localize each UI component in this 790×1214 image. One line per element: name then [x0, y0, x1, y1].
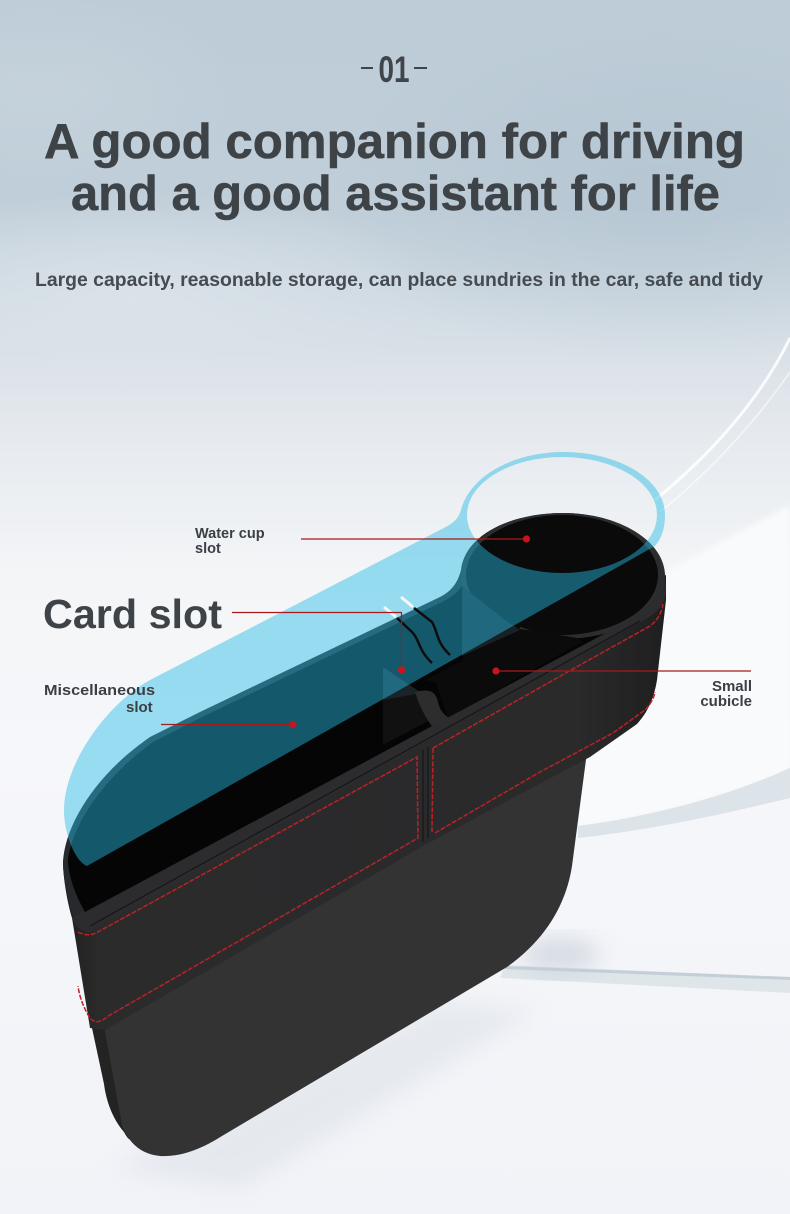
callout: water cup slot: Water cup — [195, 526, 265, 542]
body rim — [63, 513, 666, 925]
leather strap — [63, 575, 666, 1030]
callout: miscellaneous slot: slot — [126, 699, 153, 716]
front lip — [72, 590, 666, 932]
lower panel — [104, 752, 587, 1156]
small cubicle — [425, 600, 582, 718]
callout: water cup slot: slot — [195, 541, 221, 557]
callout: card slot — [43, 591, 405, 674]
clip wires — [384, 597, 450, 663]
blue transparent overlay — [64, 452, 665, 866]
callout: water cup slot — [195, 526, 530, 557]
strap seam — [423, 747, 428, 842]
product: seat gap organizer — [63, 513, 666, 1156]
title: A good companion for driving — [44, 115, 745, 169]
callout: small cubicle: Small — [712, 678, 752, 695]
lower side strip — [92, 1028, 130, 1139]
divider block — [383, 667, 430, 745]
title — [44, 115, 745, 221]
interior opening — [68, 578, 658, 912]
number marker — [361, 49, 427, 90]
title: and a good assistant for life — [71, 167, 720, 221]
center clip — [415, 690, 452, 730]
cup opening — [461, 513, 665, 639]
callout: miscellaneous slot: Miscellaneous — [44, 682, 155, 699]
number marker: 01 — [378, 49, 410, 90]
callout: small cubicle: cubicle — [700, 693, 752, 710]
callout: small cubicle — [492, 667, 752, 710]
red stitching — [78, 604, 663, 1022]
callout: card slot: Card slot — [43, 591, 222, 637]
callout: miscellaneous slot — [44, 682, 297, 728]
subtitle: Large capacity, reasonable storage, can place sundries in the car, safe and tidy — [35, 270, 763, 291]
cubicle wall — [462, 586, 520, 656]
